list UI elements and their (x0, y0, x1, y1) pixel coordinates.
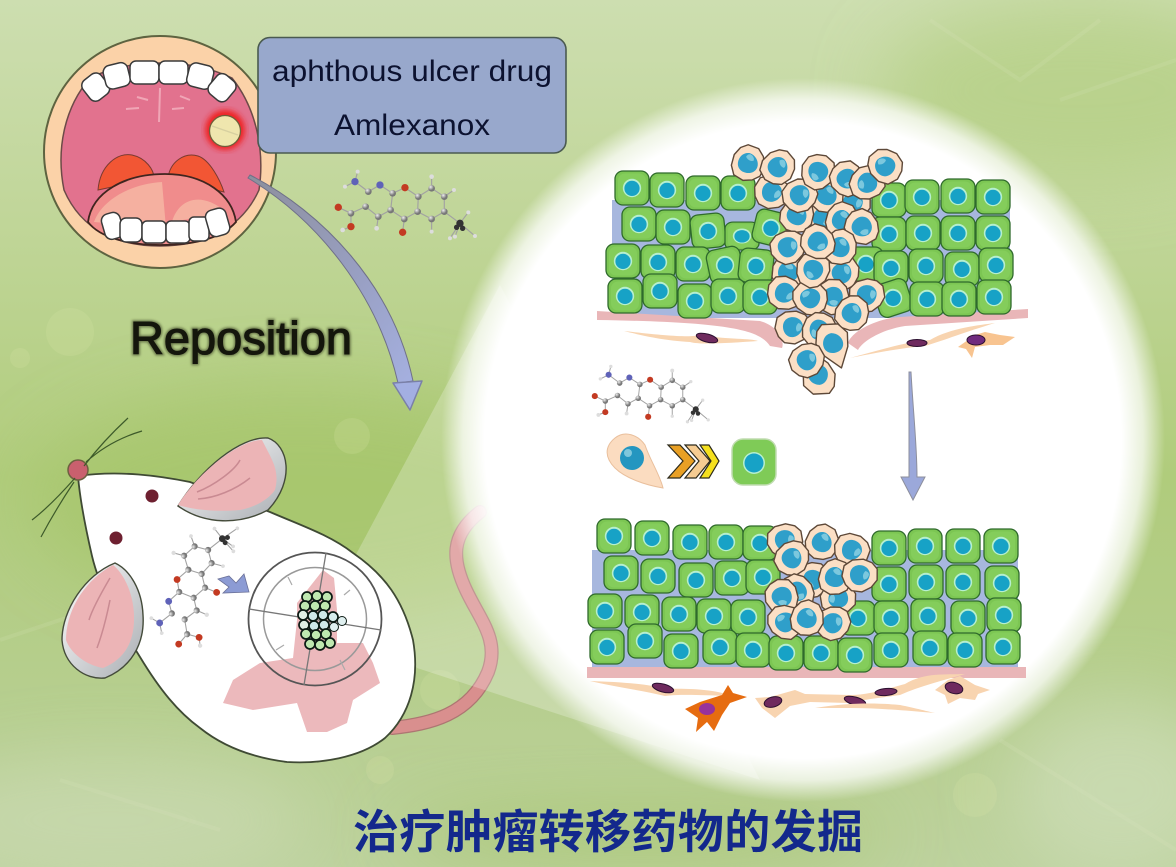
mouse body (78, 474, 415, 762)
small pointer arrow (218, 574, 249, 593)
drug tablet (210, 116, 240, 146)
mouse nose (68, 460, 88, 480)
whiskers (32, 418, 142, 537)
basement layer (592, 550, 1018, 668)
stromal fibroblasts (590, 674, 990, 732)
title: 治疗肿瘤转移药物的发掘 (353, 806, 863, 858)
upper teeth (79, 61, 239, 105)
mouth illustration (44, 36, 276, 268)
membrane (597, 309, 1028, 350)
Reposition label: Reposition (130, 312, 352, 364)
tumor cell cluster (298, 591, 346, 650)
mouth interior (61, 63, 261, 246)
mouse eyes (110, 490, 158, 544)
green epithelial cells (606, 171, 1013, 319)
drug name: Amlexanox (334, 109, 490, 142)
upper tissue panel: invasive tumor (597, 141, 1028, 397)
curved arrow: mouth to mouse (248, 175, 422, 410)
remaining tumor cells (760, 519, 881, 647)
ulcer (205, 110, 245, 150)
tongue (88, 174, 236, 245)
molecule in panel (592, 365, 710, 423)
molecule on mouse (144, 511, 242, 655)
basement layer (612, 200, 1010, 318)
green epithelial cells (588, 519, 1021, 672)
invading tumor cells (729, 141, 910, 397)
lower ear (62, 563, 143, 678)
drug class label: aphthous ulcer drug (272, 55, 552, 88)
differentiation legend (607, 434, 776, 488)
tumor cell (607, 434, 663, 488)
lower teeth (100, 206, 231, 243)
lower tissue panel: treated (587, 519, 1026, 732)
mouse tail (392, 512, 492, 728)
down arrow (901, 372, 925, 500)
magnifier circle (248, 552, 382, 686)
metastasis patch (223, 570, 380, 732)
tonsils (98, 155, 224, 192)
triple chevron arrow (668, 445, 719, 478)
green normal cell (732, 439, 776, 485)
Reposition label: Reposition (130, 312, 352, 364)
stromal fibroblasts (624, 323, 1015, 358)
upper ear (178, 438, 286, 521)
membrane (587, 667, 1026, 678)
drug label box (258, 38, 566, 153)
projection beam (345, 285, 760, 780)
mouth outer skin (44, 36, 276, 268)
palate lines (126, 88, 190, 122)
amlexanox molecule (335, 170, 477, 240)
magnified circle (441, 78, 1165, 802)
mouse (32, 418, 415, 762)
